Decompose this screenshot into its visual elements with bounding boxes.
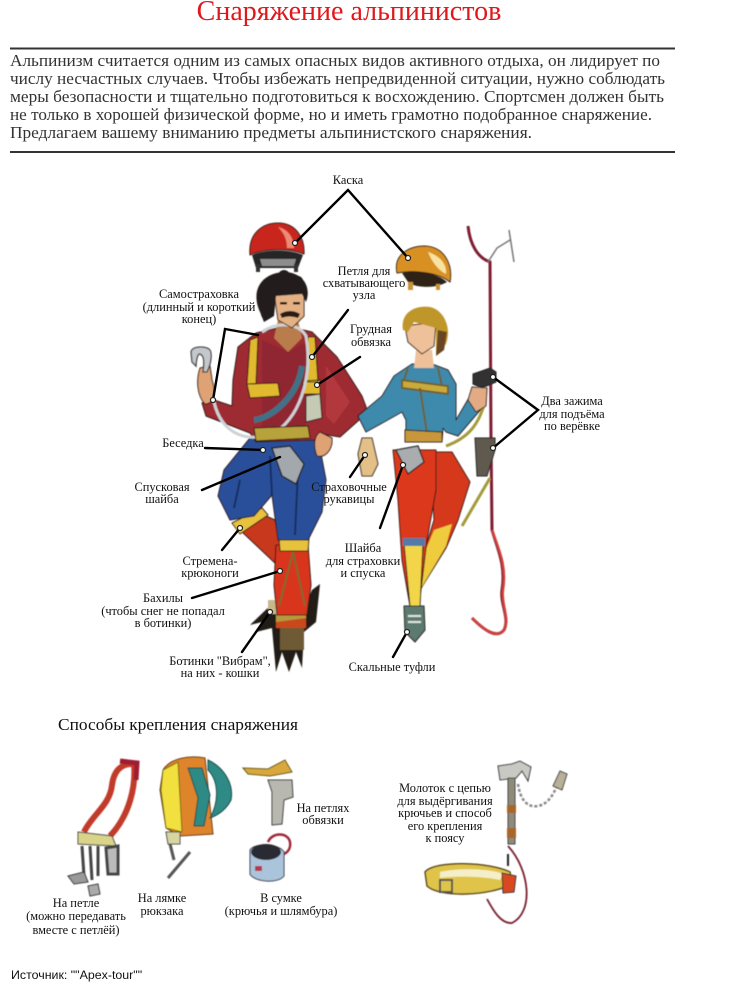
icon: climbing shoe (404, 606, 425, 642)
label: belay plate: Шайба (345, 541, 382, 555)
label: gaiters: в ботинки) (135, 616, 191, 630)
label: ascenders (539, 394, 605, 433)
bent leg (416, 452, 470, 590)
label: in a pouch: (крючья и шлямбура) (225, 904, 337, 918)
label: boots (169, 654, 271, 680)
label: sit harness: Беседка (162, 436, 204, 450)
icon: pouch (250, 834, 290, 881)
bent leg gaiter (240, 512, 282, 564)
label: boots: на них - кошки (181, 666, 260, 680)
label: hammer: Молоток с цепью (399, 781, 491, 795)
label: belay plate: для страховки (326, 554, 401, 568)
illustration: female climber (358, 307, 490, 642)
label: chest harness: Грудная (350, 322, 392, 336)
label: ascenders: Два зажима (541, 394, 603, 408)
sling (446, 405, 490, 526)
icon: carabiner (191, 347, 211, 372)
label: on a backpack strap (138, 891, 187, 918)
label: on harness loops: На петлях (297, 801, 350, 815)
label: belay gloves: Страховочные (311, 480, 387, 494)
intro text: числу несчастных случаев. Чтобы избежать непредвиденной ситуации, нужно соблюдать (10, 69, 665, 88)
label: stirrups: Стремена- (183, 554, 237, 568)
label: stirrups: крюконоги (181, 566, 239, 580)
source: Источник: ""Apex-tour"" (11, 968, 142, 982)
icon: mitten (358, 438, 378, 476)
right hand (315, 432, 332, 456)
label: on a backpack strap: На лямке (138, 891, 187, 905)
label: hammer (397, 781, 493, 845)
neck (414, 350, 434, 368)
label: descender: шайба (145, 492, 179, 506)
intro text: Альпинизм считается одним из самых опасных видов активного отдыха, он лидирует по (10, 51, 660, 70)
icon: lower ascender (475, 438, 495, 476)
label: hammer: для выдёргивания (397, 794, 493, 808)
trousers (218, 438, 326, 540)
icon: anchor (488, 230, 514, 262)
straight leg (393, 450, 436, 606)
intro panel (10, 48, 675, 153)
label: belay plate (326, 541, 401, 580)
icon: upper ascender (473, 368, 496, 388)
label: ascenders: для подъёма (539, 407, 605, 421)
label: prusik loop: узла (353, 288, 376, 302)
label: prusik loop: схватывающего (323, 276, 405, 290)
icon: red helmet (250, 223, 304, 272)
label: descender (134, 480, 190, 506)
waist harness (405, 430, 442, 442)
icon: gear on a sling (68, 761, 137, 896)
illustration: rope with ascenders (468, 226, 514, 634)
heading: attachment methods: Способы крепления снаряжения (58, 715, 298, 734)
label: gaiters (101, 591, 225, 630)
label: in a pouch: В сумке (260, 891, 302, 905)
icon: hammer with chain and belt (425, 761, 567, 923)
label: descender: Спусковая (134, 480, 190, 494)
label: belay plate: и спуска (341, 566, 386, 580)
head (274, 292, 304, 328)
torso and arms (358, 364, 482, 442)
intro text: Предлагаем вашему вниманию предметы альпинистского снаряжения. (10, 123, 532, 142)
label: rock shoes: Скальные туфли (349, 660, 436, 674)
label: on a sling: (можно передавать (26, 909, 126, 923)
label: helmet: Каска (333, 173, 364, 187)
label: on harness loops: обвязки (302, 813, 344, 827)
shirt with left arm (202, 326, 368, 442)
label: hammer: крючьев и способ (398, 806, 492, 820)
label: self-belay: Самостраховка (159, 287, 239, 301)
label: on a sling (26, 896, 126, 937)
label: belay gloves (311, 480, 387, 506)
waist belt and descender (254, 426, 310, 441)
hardware rack (306, 394, 322, 422)
label: belay gloves: рукавицы (324, 492, 375, 506)
icon: gold helmet (396, 246, 451, 290)
label: hammer: его крепления (408, 819, 483, 833)
leader lines (192, 190, 538, 657)
boots and crampons (250, 584, 320, 672)
label: on harness loops (297, 801, 350, 827)
label: on a sling: вместе с петлёй) (32, 923, 120, 937)
label: chest harness (350, 322, 392, 349)
chest harness straps (247, 337, 320, 398)
label: on a backpack strap: рюкзака (140, 904, 184, 918)
label: stirrups (181, 554, 239, 580)
label: on a sling: На петле (53, 896, 100, 910)
label: self-belay: конец) (182, 312, 216, 326)
label: hammer: к поясу (426, 831, 465, 845)
intro text (10, 51, 665, 142)
head (405, 322, 436, 354)
label: gaiters: (чтобы снег не попадал (101, 604, 225, 618)
label: gaiters: Бахилы (143, 591, 184, 605)
label: boots: Ботинки "Вибрам", (169, 654, 271, 668)
label: self-belay (143, 287, 256, 326)
sling lanyard (214, 325, 308, 437)
right hand (468, 387, 487, 412)
intro text: меры безопасности и тщательно подготовиться к восхождению. Спортсмен должен быть (10, 87, 664, 106)
icon: backpack (160, 757, 232, 878)
label: prusik loop (323, 264, 405, 302)
label: chest harness: обвязка (351, 335, 392, 349)
neck (274, 320, 302, 352)
label: self-belay: (длинный и короткий (143, 300, 256, 314)
label: in a pouch (225, 891, 337, 918)
icon: gear on harness loops (243, 760, 293, 825)
intro text: не только в хорошей физической форме, но и иметь грамотно подобранное снаряжение. (10, 105, 652, 124)
left hand (198, 366, 214, 404)
label: prusik loop: Петля для (338, 264, 391, 278)
illustration: male climber (191, 270, 368, 672)
label: ascenders: по верёвке (544, 419, 600, 433)
standing leg gaiter (274, 545, 311, 615)
